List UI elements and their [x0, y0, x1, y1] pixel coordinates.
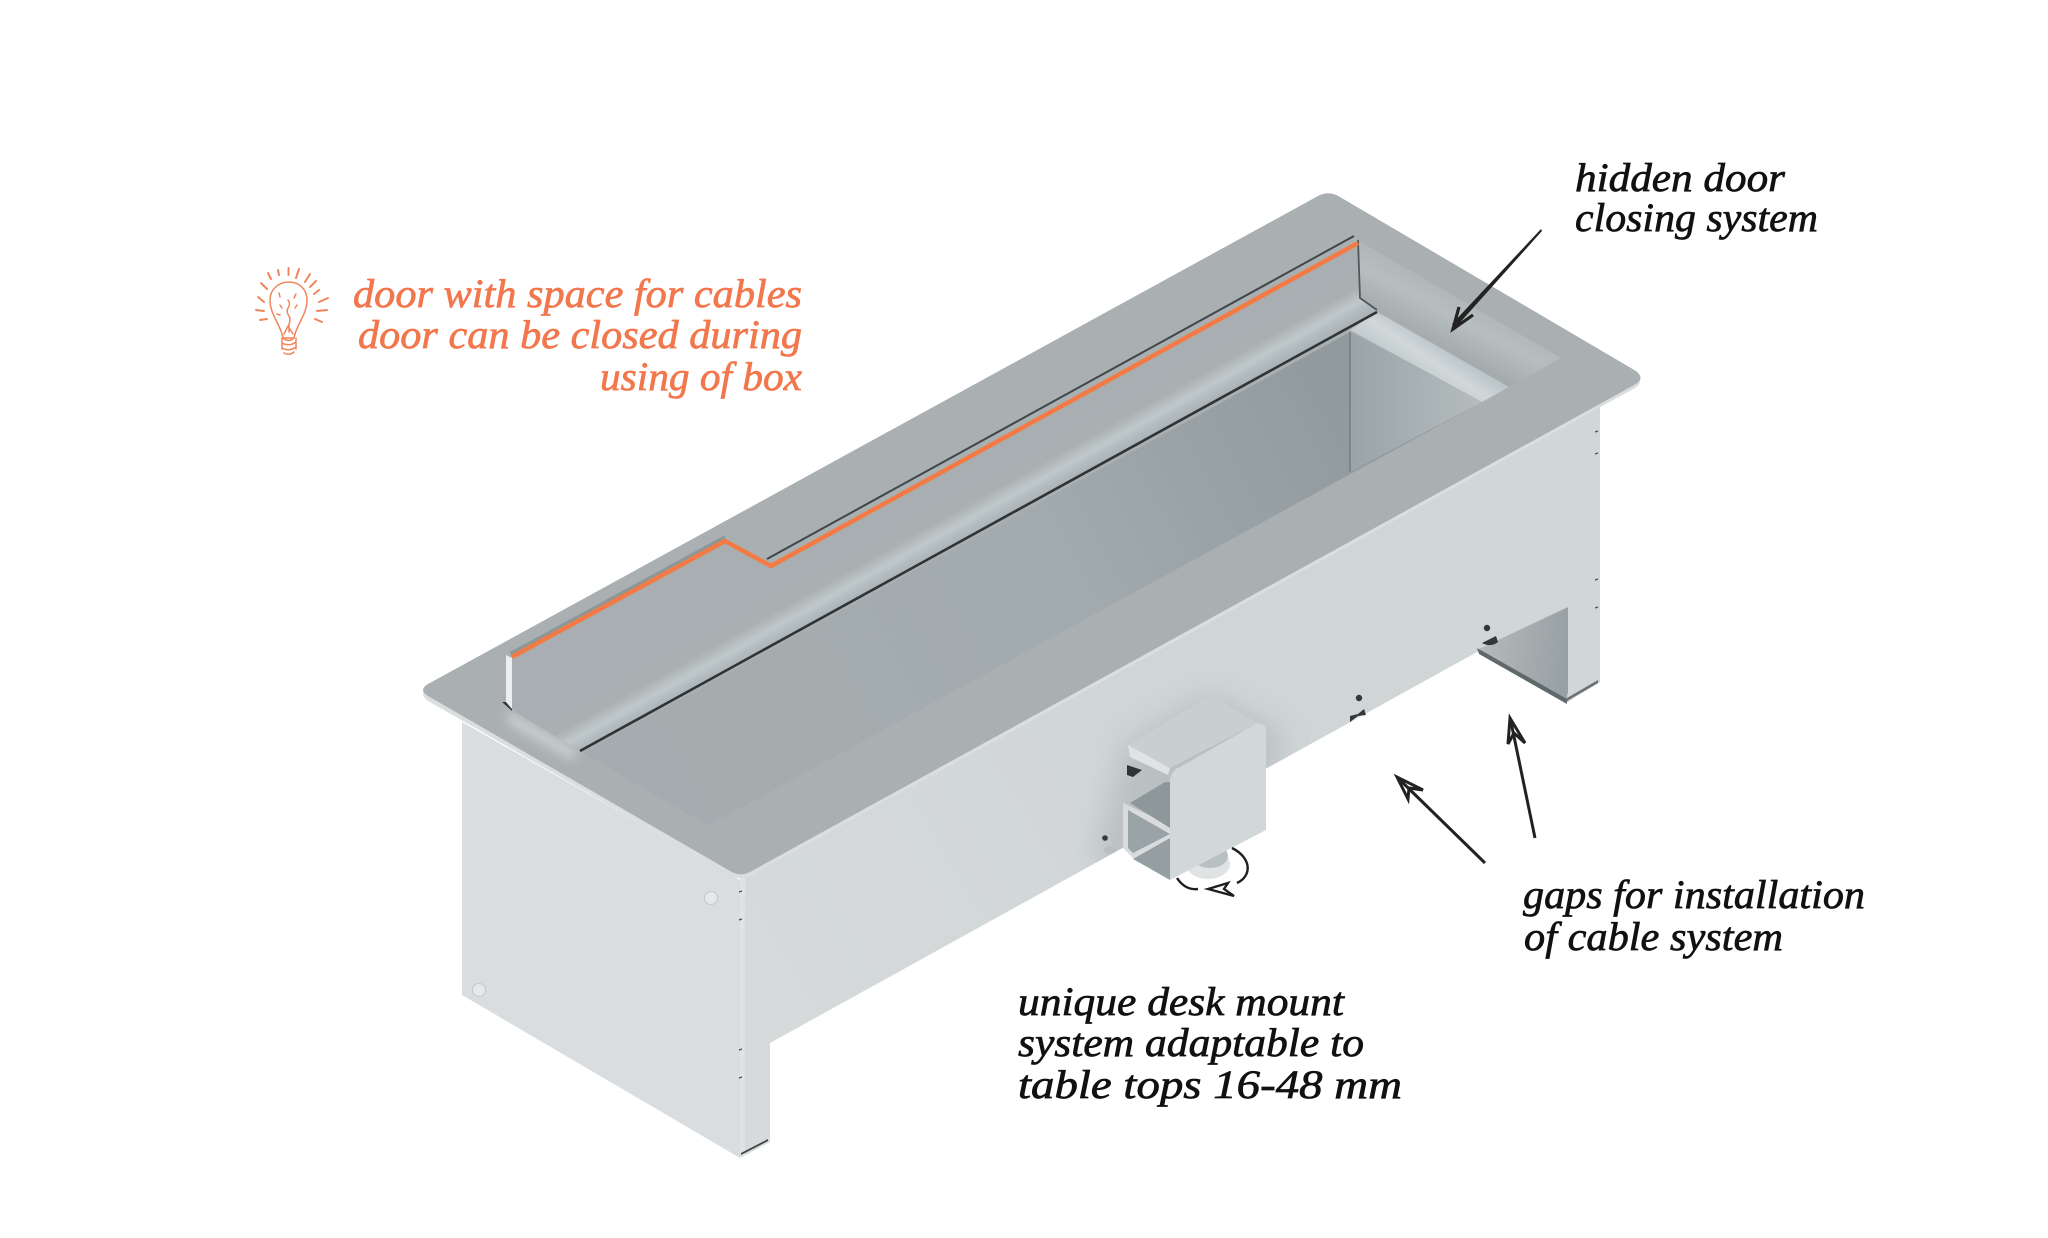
door end cap	[506, 655, 512, 710]
arrow: gap two	[1508, 718, 1535, 838]
callout: door with space for cables	[353, 271, 802, 399]
end panel	[462, 722, 740, 1158]
back corner line	[1358, 240, 1377, 310]
arrow: hidden door	[1452, 229, 1542, 329]
infographic canvas	[255, 162, 1864, 1158]
callout: unique desk mount	[1018, 979, 1402, 1107]
door upper gap	[767, 236, 1354, 559]
callout: door with space for cables: door with space for cables	[353, 271, 802, 316]
foot	[1186, 844, 1230, 879]
upper cell	[1130, 782, 1170, 828]
top flap	[1128, 697, 1257, 768]
table top plate	[423, 193, 1640, 874]
interior corner line	[1349, 332, 1351, 472]
lower cell	[1133, 838, 1170, 880]
corner fold	[740, 875, 745, 1158]
edge ticks	[739, 431, 1598, 1078]
door slit	[580, 312, 1377, 751]
door notch	[502, 702, 512, 711]
callout: unique desk mount: system adaptable to	[1018, 1020, 1364, 1065]
front face	[1170, 723, 1266, 880]
orange door outline	[512, 243, 1358, 657]
desk mount bracket	[1123, 697, 1266, 880]
gap in far side	[1477, 590, 1600, 704]
callout: hidden door closing system	[1575, 155, 1818, 240]
interior floor	[583, 332, 1482, 826]
plate highlight near door end	[505, 708, 580, 760]
callout: gaps for installation: of cable system	[1524, 914, 1783, 959]
callout: unique desk mount: table tops 16-48 mm	[1018, 1062, 1402, 1107]
long side panel	[740, 405, 1600, 1158]
foot bump	[1104, 846, 1116, 854]
product illustration: cable box	[423, 193, 1640, 1158]
callout: hidden door closing system: closing system	[1575, 195, 1818, 240]
icon: rotation arrow	[1177, 848, 1248, 896]
icon: light bulb	[256, 268, 328, 354]
bracket shadow	[1094, 696, 1284, 861]
callout: door with space for cables: using of box	[600, 354, 802, 399]
door panel	[512, 243, 1377, 751]
callout: hidden door closing system: hidden door	[1575, 155, 1785, 200]
slot	[1127, 765, 1142, 777]
light strip	[1350, 312, 1509, 402]
callout: door with space for cables: door can be closed during	[358, 312, 802, 357]
flap lip	[1128, 745, 1170, 775]
hidden recess	[1354, 238, 1561, 387]
callout: unique desk mount: unique desk mount	[1018, 979, 1345, 1024]
middle cell	[1128, 810, 1170, 853]
table top plate edge	[423, 198, 1640, 878]
leg bottom slot	[741, 1139, 768, 1155]
callout: gaps for installation: gaps for installation	[1523, 872, 1865, 917]
profile frame	[1123, 803, 1170, 880]
screws	[472, 892, 718, 996]
interior end wall	[1350, 332, 1482, 472]
callout: gaps for installation	[1523, 872, 1865, 959]
door lip shade	[510, 535, 725, 658]
mount holes	[1102, 625, 1498, 841]
arrow: gap one	[1397, 777, 1485, 863]
